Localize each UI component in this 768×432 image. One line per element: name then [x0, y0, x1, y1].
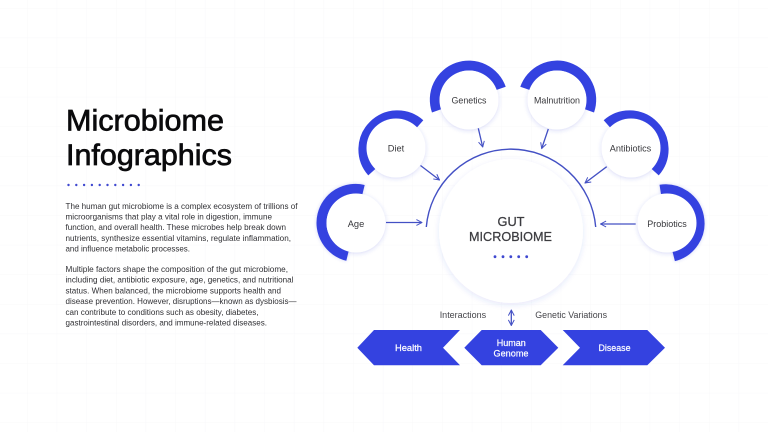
node: Diet: Diet: [388, 144, 405, 154]
node: Antibiotics: [602, 115, 664, 178]
chevron: Disease: Disease: [598, 343, 630, 354]
text block: intro paragraph: microorganisms that play a vital role in digestion, immune: [66, 212, 272, 222]
chevron: Health: Health: [395, 343, 422, 354]
arrow: Malnutrition to centre: [542, 129, 548, 148]
central label: MICROBIOME: [469, 229, 552, 244]
central label: [469, 214, 552, 244]
text block: factors paragraph: including diet, antibiotic exposure, age, genetics, and nutritional: [66, 275, 294, 285]
arrow: Genetics to centre: [478, 128, 483, 147]
node: Probiotics: Probiotics: [647, 219, 687, 230]
arrow: Probiotics to centre: [600, 223, 636, 225]
chevron: Human Genome: Human: [497, 338, 526, 349]
node: Age: Age: [348, 219, 364, 230]
chevron: Human Genome: Genome: [494, 348, 528, 359]
chevron: Disease: [563, 330, 665, 365]
node: Malnutrition: [525, 66, 591, 130]
arrow: Diet to centre: [420, 166, 440, 180]
title: Microbiome: [66, 104, 224, 138]
text block: intro paragraph: and influence metabolic processes.: [66, 243, 190, 253]
text block: intro paragraph: The human gut microbiome is a complex ecosystem of trillions of: [66, 201, 298, 211]
text block: factors paragraph: Multiple factors shape the composition of the gut microbiome,: [66, 264, 288, 274]
text block: factors paragraph: gastrointestinal disorders, and immune-related diseases.: [66, 318, 267, 328]
text block: intro paragraph: nutrients, synthesize essential vitamins, regulate inflammation,: [66, 233, 291, 243]
text block: factors paragraph: status. When balanced, the microbiome supports health and: [66, 285, 281, 295]
arrow: Antibiotics to centre: [585, 167, 607, 183]
central dots: [494, 255, 528, 258]
text block: intro paragraph: function, and overall health. These microbes help break down: [66, 222, 286, 232]
text block: intro paragraph: [66, 201, 298, 253]
arrow: Age to centre: [386, 222, 422, 224]
central label: GUT: [498, 214, 525, 229]
arc around central circle: [426, 149, 596, 227]
chevron: Health: [357, 330, 460, 365]
title: [66, 104, 232, 172]
label: Genetic Variations: Genetic Variations: [535, 310, 607, 321]
central circle: gut microbiome: [439, 159, 583, 303]
node: Antibiotics: Antibiotics: [610, 144, 651, 154]
node: Genetics: Genetics: [452, 96, 487, 106]
title dotted divider: [67, 184, 140, 186]
double arrow: [510, 310, 512, 326]
node: Diet: [363, 115, 426, 178]
node: Age: [321, 189, 386, 256]
node: Probiotics: [638, 189, 700, 256]
node: Genetics: [435, 66, 501, 130]
text block: factors paragraph: [66, 264, 297, 328]
label: Interactions: Interactions: [440, 310, 486, 321]
text block: factors paragraph: can contribute to conditions such as obesity, diabetes,: [66, 307, 258, 317]
node: Malnutrition: Malnutrition: [534, 96, 580, 106]
text block: factors paragraph: disease prevention. However, disruptions—known as dysbiosis—: [66, 296, 297, 306]
chevron: Human Genome: [464, 330, 558, 365]
title: Infographics: [66, 139, 232, 172]
